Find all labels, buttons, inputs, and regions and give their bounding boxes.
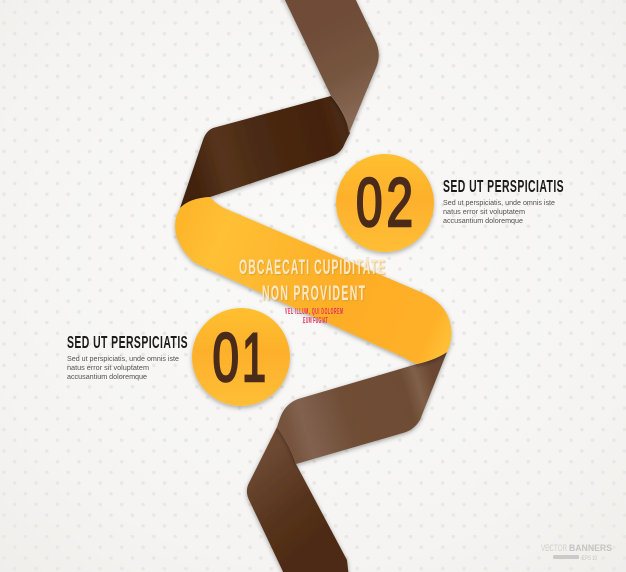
body 02: accusantium doloremque <box>443 216 523 225</box>
ribbon: dark brown segment <box>180 96 350 208</box>
text block 01 <box>67 333 188 381</box>
central subtitle: EUM FUGIAT <box>303 317 328 326</box>
body 01: accusantium doloremque <box>67 372 147 381</box>
body 01: natus error sit voluptatem <box>67 363 149 372</box>
title text <box>239 255 385 305</box>
number 02 <box>356 164 413 241</box>
ribbon: top light brown segment <box>282 0 379 133</box>
heading 01: SED UT PERSPICIATIS <box>67 333 188 353</box>
watermark <box>541 543 612 562</box>
body 02: natus error sit voluptatem <box>443 207 525 216</box>
title line shadow <box>240 256 386 306</box>
central subtitle: VEL ILLUM, QUI DOLOREM <box>285 308 343 317</box>
watermark: BANNERS <box>569 543 612 554</box>
ribbon <box>175 0 451 572</box>
text block 02 <box>443 177 564 225</box>
title line shadow: OBCAECATI CUPIDITATE <box>240 256 386 280</box>
number 01: 1 <box>242 319 266 396</box>
watermark: EPS 10 <box>582 556 597 562</box>
circle badge 02 <box>336 154 434 252</box>
body 01: Sed ut perspiciatis, unde omnis iste <box>67 354 179 363</box>
body 02 <box>443 198 555 225</box>
title text: OBCAECATI CUPIDITATE <box>239 255 385 279</box>
ribbon: bottom brown segment <box>247 427 349 572</box>
central subtitle <box>285 308 343 326</box>
body 01 <box>67 354 179 381</box>
title line shadow: NON PROVIDENT <box>263 282 366 306</box>
circle badge 01 <box>192 308 290 406</box>
ribbon: yellow segment <box>175 197 451 364</box>
ribbon: middle light brown segment <box>277 352 447 464</box>
body 02: Sed ut perspiciatis, unde omnis iste <box>443 198 555 207</box>
heading 02: SED UT PERSPICIATIS <box>443 177 564 197</box>
central title <box>239 255 386 306</box>
number 01: 0 <box>212 319 239 396</box>
watermark: VECTOR <box>541 543 567 553</box>
number 02: 2 <box>386 164 413 241</box>
title text: NON PROVIDENT <box>262 281 365 305</box>
number 02: 0 <box>356 164 382 241</box>
